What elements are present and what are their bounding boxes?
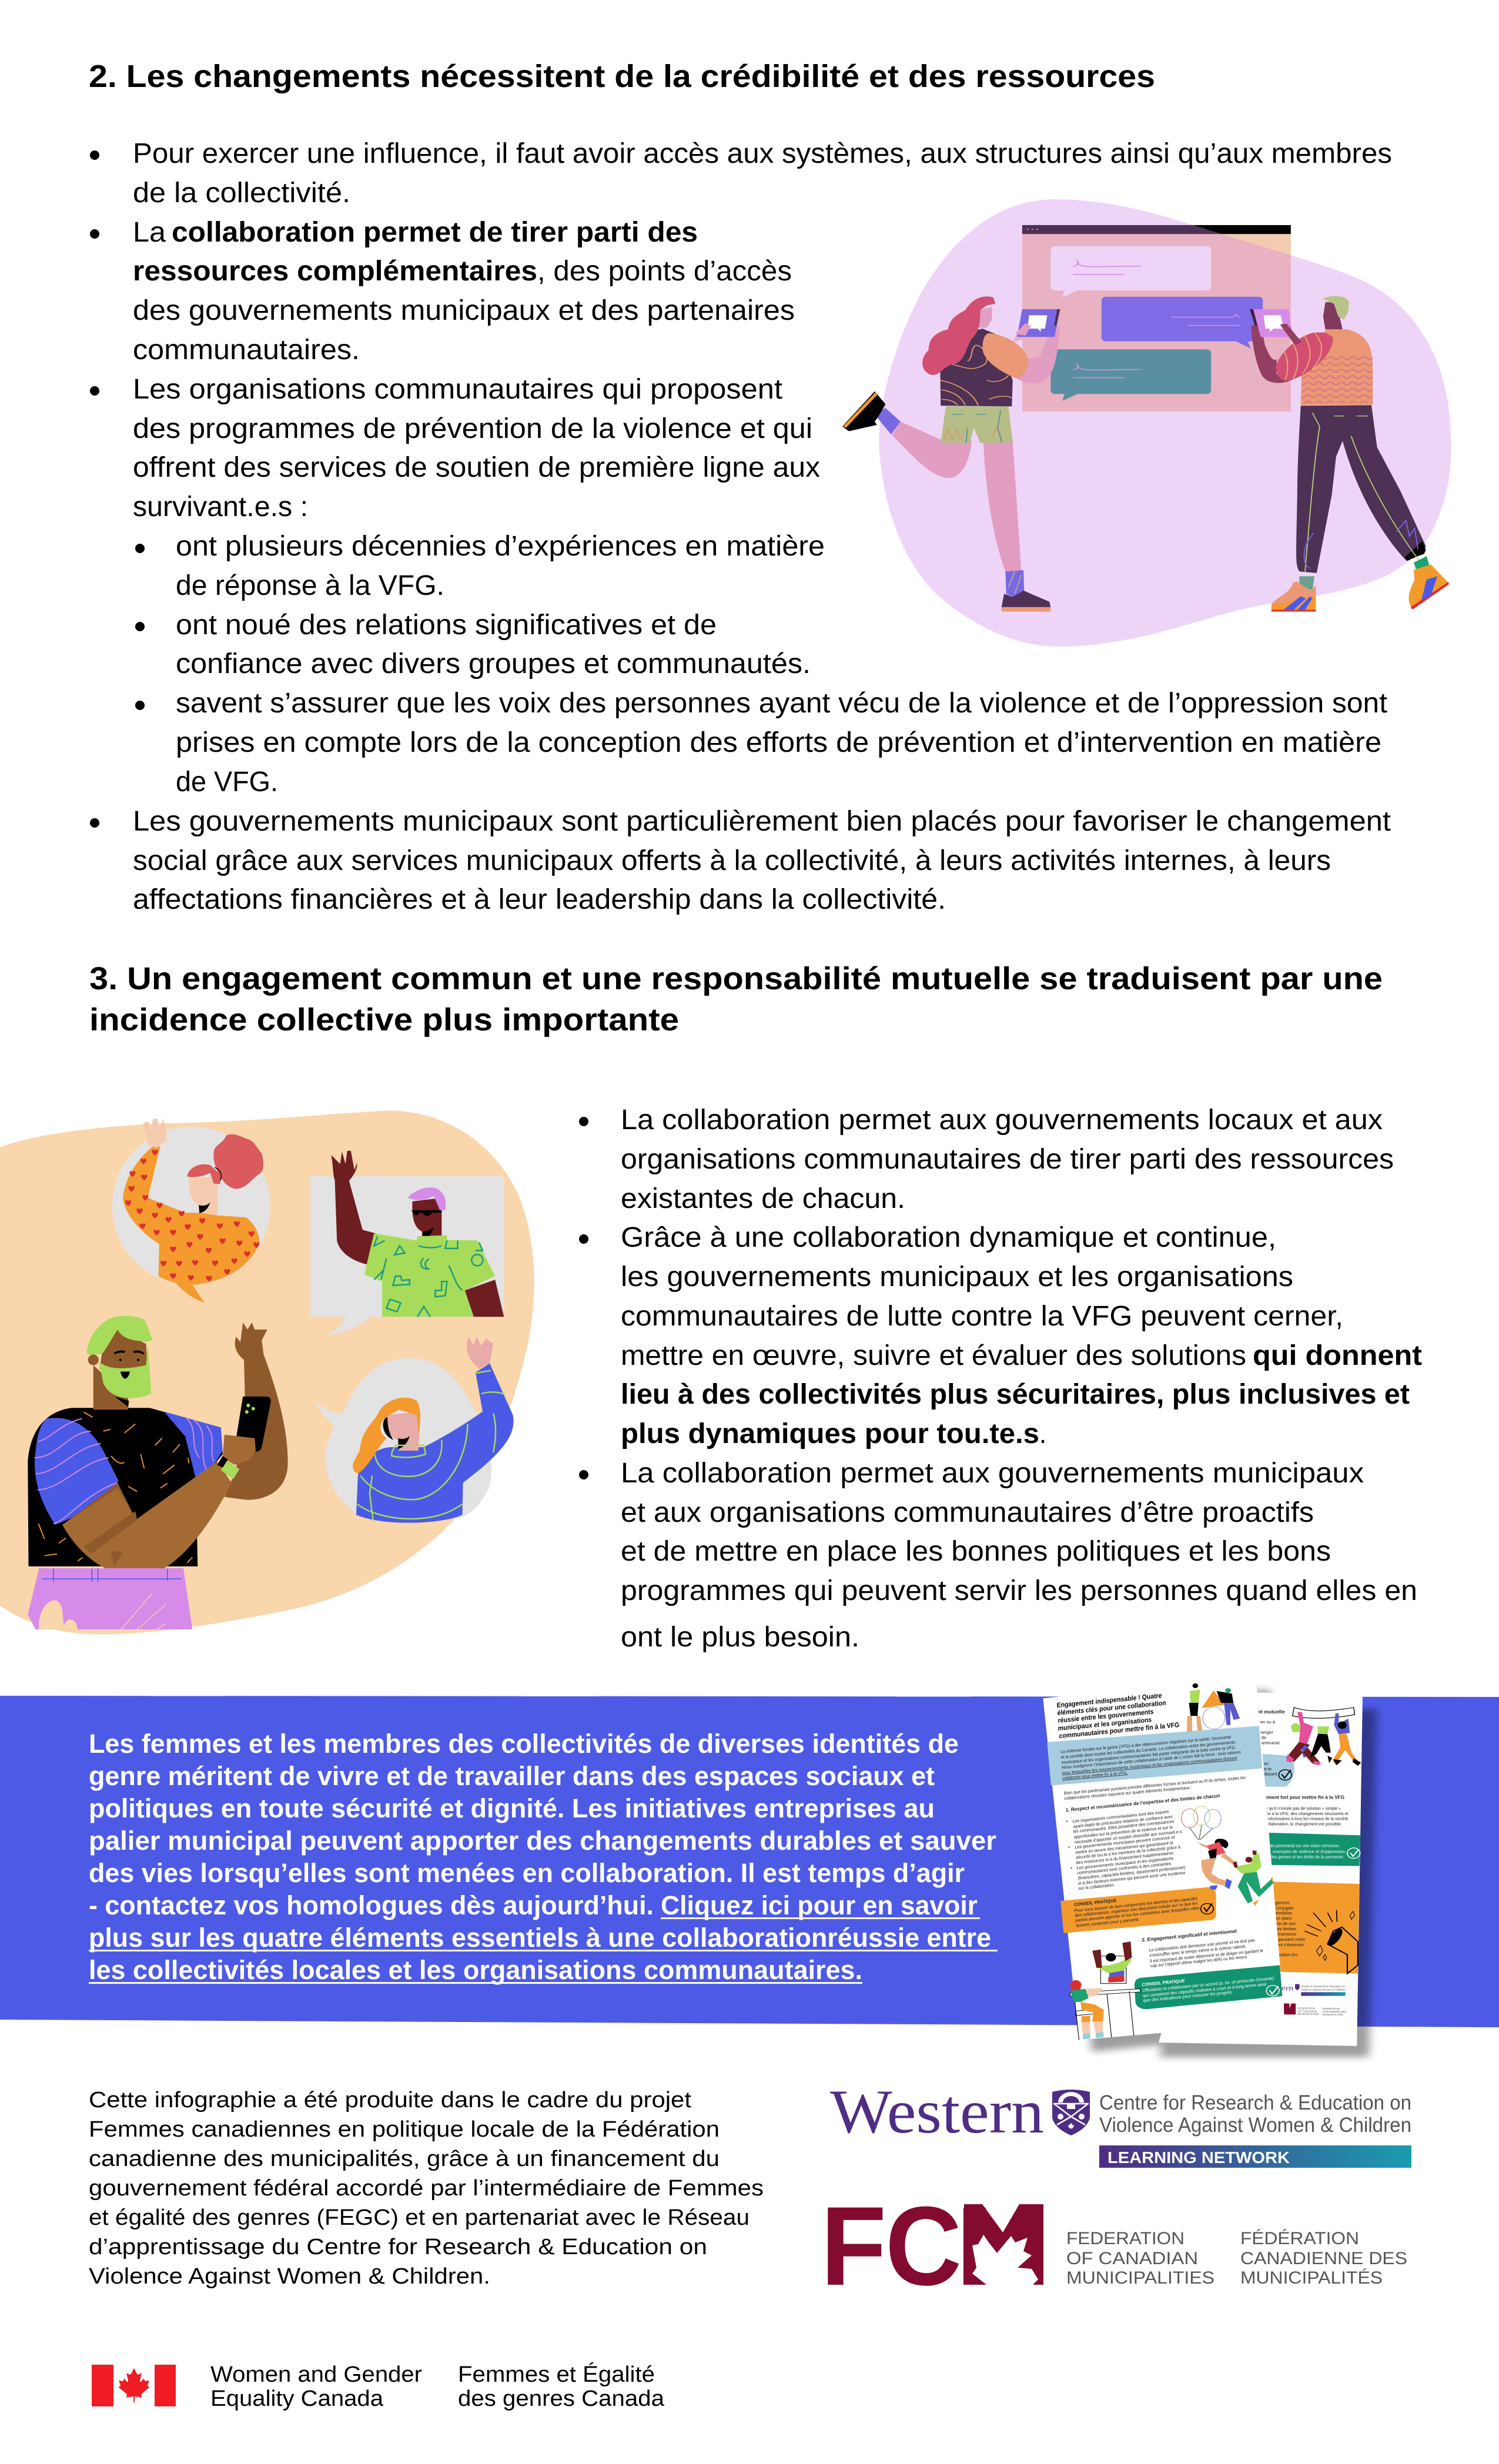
call to action text: Les femmes et les membres des collectivités de diverses identités de <box>89 1729 959 1759</box>
FCM name: MUNICIPALITIES <box>1066 2268 1214 2288</box>
back page logos: MUNICIPALITÉS <box>1323 2013 1343 2017</box>
back page: ollaboration, le changement est possible. <box>1266 1821 1342 1826</box>
FCM name: FÉDÉRATION <box>1240 2229 1359 2248</box>
back page: peuvent créer <box>1278 1937 1306 1942</box>
back page logos: OF CANADIAN <box>1297 2010 1317 2013</box>
bullet list: section 3 <box>579 1104 1422 1653</box>
front page text <box>1057 1691 1274 2003</box>
back page: ensibilise. <box>1275 1910 1293 1916</box>
back page: nécessaires à tous les niveaux de la société. <box>1268 1816 1349 1821</box>
credits text: canadienne des municipalités, grâce à un financement du <box>89 2147 720 2171</box>
logo: Western Centre for Research and Education <box>830 2077 1411 2168</box>
bullet list: section 2: prises en compte lors de la conception des efforts de prévention et d’intervention en matière <box>176 727 1381 758</box>
bullet list: section 3: programmes qui peuvent servir les personnes quand elles en <box>621 1575 1417 1606</box>
back page: conjugale <box>1276 1905 1294 1910</box>
front page text: réussie entre les gouvernements <box>1058 1708 1153 1725</box>
front page text: ayant établi de précieuses relations de confiance avec <box>1073 1814 1173 1829</box>
front page text: La violence fondée sur le genre (VFG) a des répercussions négatives sur la santé, l’économie <box>1060 1734 1231 1754</box>
front page text: que des indicateurs pour mesurer les progrès. <box>1143 1989 1233 2003</box>
bullet list: section 3: et de mettre en place les bonnes politiques et les bons <box>621 1536 1331 1567</box>
front page text: qui comprend des objectifs réalistes à court et à long terme ainsi <box>1143 1981 1266 1998</box>
person in square bubble <box>310 1151 504 1335</box>
bullet list: section 3: les gouvernements municipaux et les organisations <box>621 1261 1293 1293</box>
front page text: sur la collaboration. <box>1078 1882 1115 1891</box>
peach blob background <box>0 1110 534 1634</box>
bullet list: section 2: savent s’assurer que les voix des personnes ayant vécu de la violence et de l’oppression sont <box>176 688 1387 719</box>
back page: et <box>1264 1761 1269 1766</box>
logo: Federation of Canadian Municipalities <box>821 2184 1407 2309</box>
bullet list: section 2: ont noué des relations significatives et de <box>176 610 717 641</box>
front page text: doivent composer pour y parvenir. <box>1076 1916 1140 1928</box>
front page text: Engagement indispensable ! Quatre <box>1057 1691 1162 1709</box>
credits text: Violence Against Women & Children. <box>89 2264 490 2289</box>
bullet list: section 2: ont plusieurs décennies d’expériences en matière <box>176 531 825 562</box>
call to action text: palier municipal peuvent apporter des changements durables et sauver <box>89 1826 996 1856</box>
front page text: CONSEIL PRATIQUE <box>1074 1897 1117 1907</box>
front page text: pour lesquelles les gouvernements municipaux et les organisations communautaires doivent <box>1062 1755 1237 1776</box>
front page text: municipaux et les organisations <box>1058 1716 1152 1732</box>
back page: des genres et les droits de la personne. <box>1270 1854 1344 1859</box>
bullet list: section 2: affectations financières et à leur leadership dans la collectivité. <box>133 884 946 915</box>
front page text: éléments clés pour une collaboration <box>1058 1699 1166 1717</box>
icon: Canadian flag <box>92 2365 176 2406</box>
bullet list: section 3: lieu à des collectivités plus sécuritaires, plus inclusives et <box>621 1379 1410 1410</box>
icon: Western shield <box>1052 2090 1090 2135</box>
bullet list: section 2: ressources complémentaires <box>133 256 537 287</box>
back page: ein de son <box>1276 1921 1296 1926</box>
back page logos: Centre for Research & Education on <box>1301 1985 1346 1988</box>
front page icons and figures <box>1066 1683 1279 2040</box>
bullet list: section 3: qui donnent <box>1253 1340 1422 1371</box>
back page: ement fort pour mettre fin à la VFG <box>1265 1794 1344 1800</box>
front page text: Bien que les partenariats puissent prendre différentes formes et évoluent au fil du temps, toutes les <box>1064 1775 1246 1796</box>
credits text: Femmes canadiennes en politique locale de la Fédération <box>89 2117 720 2142</box>
back page <box>1159 1692 1363 2046</box>
front page text: les communautés. Elles possèdent des connaissances <box>1073 1819 1174 1834</box>
call to action text: politiques en toute sécurité et dignité. Les initiatives entreprises au <box>89 1793 935 1823</box>
FCM letters: M <box>956 2184 1051 2309</box>
flying woman <box>1214 1839 1224 1846</box>
bullet list: section 3: La collaboration permet aux gouvernements municipaux <box>621 1458 1364 1489</box>
back page: et de <box>1264 1766 1272 1772</box>
back page group photo <box>1286 1708 1361 1766</box>
front page text: Officialisez la collaboration par un accord (p. ex. un protocole d’entente) <box>1142 1976 1274 1993</box>
logo: Women and Gender Equality Canada: Equality Canada <box>210 2386 384 2411</box>
logo: Women and Gender Equality Canada: Women and Gender <box>210 2362 422 2387</box>
call to action text: des vies lorsqu’elles sont menées en collaboration. Il est temps d’agir <box>89 1858 965 1888</box>
front page text: collaborations réussies reposent sur quatre éléments fondamentaux : <box>1065 1785 1192 1801</box>
FCM letters: F <box>821 2184 886 2309</box>
bullet list: section 3: mettre en œuvre, suivre et évaluer des solutions <box>621 1340 1246 1371</box>
bullet list: section 2 <box>90 138 1392 915</box>
back page: ité mutuelle <box>1257 1709 1285 1715</box>
logo: Western Centre for Research and Education: Violence Against Women & Children <box>1099 2114 1411 2137</box>
front page text: Pour vous assurer de bien comprendre les attentes et les capacités <box>1075 1896 1197 1913</box>
desk scene <box>1100 1956 1126 1984</box>
back page logos: CANADIENNE DES <box>1323 2011 1347 2014</box>
link underlines <box>89 1917 998 1984</box>
front page text: collaborer pour mettre fin à la VFG. <box>1062 1770 1127 1781</box>
credits text: Cette infographie a été produite dans le cadre du projet <box>89 2088 691 2113</box>
logo: Women and Gender Equality Canada <box>92 2362 665 2411</box>
front page text: parties peuvent apporter et sur les contraintes avec lesquelles elles <box>1075 1905 1199 1923</box>
call to action text: - contactez vos homologues dès aujourd’hui. <box>89 1890 654 1920</box>
logo: Women and Gender Equality Canada: Femmes et Égalité <box>458 2362 655 2387</box>
back page: dépant <box>1263 1771 1277 1776</box>
credits text: gouvernement fédéral accordé par l’intermédiaire de Femmes <box>89 2176 764 2201</box>
bullet list: section 2: social grâce aux services municipaux offerts à la collectivité, à leurs activités internes, à leurs <box>133 845 1331 876</box>
bullet list: section 2: Pour exercer une influence, il faut avoir accès aux systèmes, aux structures ainsi qu’aux membres <box>133 138 1392 169</box>
call to action band <box>0 1696 1499 2027</box>
front page text: des ressources et à du financement supplémentaires. <box>1076 1850 1175 1865</box>
bullet list: section 3: existantes de chacun. <box>621 1183 905 1214</box>
front page text: communautaires sont confrontés à des contraintes <box>1077 1861 1171 1876</box>
page shadows <box>1057 1690 1377 2057</box>
front page <box>1043 1677 1285 2040</box>
bullet list: section 3: organisations communautaires de tirer parti des ressources <box>621 1144 1394 1175</box>
bullet list: section 2: Les organisations communautaires qui proposent <box>133 374 782 405</box>
call to action text: genre méritent de vivre et de travailler dans des espaces sociaux et <box>89 1761 935 1791</box>
bullet list: section 2: collaboration permet de tirer parti des <box>172 217 698 248</box>
leaflet preview: two tilted pages <box>1043 1677 1377 2057</box>
bullet list: section 3: . <box>1039 1418 1046 1449</box>
front page text: approfondies sur la prévention de la violence et sur la <box>1074 1824 1173 1840</box>
woman figure <box>842 296 1060 612</box>
learning network bar: LEARNING NETWORK <box>1107 2148 1290 2167</box>
credits text <box>89 2088 764 2289</box>
bullet list: section 2: de la collectivité. <box>133 178 350 209</box>
chat window <box>1022 225 1291 411</box>
bullet list: section 2: confiance avec divers groupes et communautés. <box>176 648 811 679</box>
heading: section 3: incidence collective plus importante <box>89 1002 679 1037</box>
bullets <box>90 150 145 828</box>
bullet list: section 2: survivant.e.s : <box>133 491 308 523</box>
front page text: Les organisations communautaires sont des experts <box>1073 1809 1169 1824</box>
pink blob background <box>879 199 1451 647</box>
back page: hanger <box>1259 1729 1273 1735</box>
front page text: communautaires pour mettre fin à la VFG <box>1059 1720 1179 1740</box>
FCM name: MUNICIPALITÉS <box>1240 2268 1383 2288</box>
front page text: La collaboration doit demeurer une priorité et ne doit pas <box>1149 1937 1255 1953</box>
front page text: 2. Engagement significatif et intentionnel <box>1142 1929 1237 1943</box>
bullet list: section 2: des programmes de prévention de la violence et qui <box>133 413 812 444</box>
heading: section 3: 3. Un engagement commun et une responsabilité mutuelle se traduisent par une <box>89 961 1383 996</box>
bullet list: section 3: communautaires de lutte contre la VFG peuvent cerner, <box>621 1301 1343 1332</box>
front page text: Les gouvernements municipaux et les organisations <box>1077 1856 1173 1870</box>
back page logos: ern <box>1281 1984 1294 1991</box>
logo: Women and Gender Equality Canada: des genres Canada <box>458 2386 665 2411</box>
front page text: 1. Respect et reconnaissance de l’expertise et des limites de chacun <box>1066 1793 1220 1813</box>
man with phone <box>28 1316 288 1629</box>
front page text: sécurité de tou.te.s les membres de la collectivité grâce à <box>1076 1844 1180 1860</box>
man figure <box>1250 296 1449 612</box>
front page text: Nous soulignons l’importance de cette collaboration à l’aide de L’union fait la force : trois raisons <box>1062 1749 1241 1770</box>
front page text: (financières, capacités limitées, épuisement professionnel) <box>1078 1864 1185 1881</box>
bullet list: section 3: ont le plus besoin. <box>621 1622 859 1653</box>
front page text: et à des facteurs externes qui peuvent avoir une incidence <box>1078 1870 1186 1886</box>
FCM name <box>1066 2229 1407 2288</box>
bullet list: section 3: Grâce à une collaboration dynamique et continue, <box>621 1222 1276 1253</box>
back page: exemptes de violence et d’oppression, <box>1273 1849 1346 1854</box>
logo: Western Centre for Research and Education: Western <box>830 2077 1044 2146</box>
illustration: two people with chat window <box>842 199 1451 647</box>
back page logos: FEDERATION <box>1297 2007 1315 2010</box>
FCM letters: C <box>885 2184 962 2309</box>
back page: en place <box>1276 1916 1292 1921</box>
back page: ner ou à <box>1259 1719 1275 1725</box>
bullet list: section 2: de réponse à la VFG. <box>176 570 444 601</box>
back page: gement <box>1275 1900 1290 1905</box>
back page: partenariat. <box>1259 1740 1281 1745</box>
FCM letters <box>821 2184 1051 2309</box>
bullet list: section 3: et aux organisations communautaires d’être proactifs <box>621 1497 1314 1528</box>
green man <box>1234 1852 1262 1873</box>
call to action text: Cliquez ici pour en savoir <box>661 1890 978 1920</box>
back page: e qu’il n’existe pas de solution « simple » <box>1266 1806 1341 1811</box>
credits text: d’apprentissage du Centre for Research & Education on <box>89 2235 707 2259</box>
back page logos: FÉDÉRATION <box>1323 2007 1340 2011</box>
FCM name: FEDERATION <box>1066 2229 1185 2248</box>
front page text: s’essouffler avec le temps même si le rythme ralentit. <box>1149 1943 1246 1958</box>
front page text: CONSEIL PRATIQUE <box>1142 1978 1185 1987</box>
bullet list: section 2: La <box>133 217 166 248</box>
person in circle bubble <box>112 1119 270 1303</box>
back page logos: MUNICIPALITIES <box>1297 2013 1319 2016</box>
bullet list: section 2: Les gouvernements municipaux sont particulièrement bien placés pour favoriser le changement <box>133 806 1391 837</box>
call to action text: plus sur les quatre éléments essentiels à une collaborationréussie entre <box>89 1923 991 1953</box>
window behind blob <box>1022 225 1291 411</box>
front page text: des collaborateurs, organisez une discussion initiale sur ce que les <box>1075 1900 1197 1918</box>
bullet list: section 2: de VFG. <box>176 766 278 798</box>
front page text: municipaux et les organisations communautaires fait partie intégrante de la lutte contre la VFG. <box>1062 1745 1236 1765</box>
back page: du partenariat sur une vision commune : <box>1270 1843 1341 1848</box>
figures with triangle <box>1202 1690 1225 1708</box>
call to action text <box>89 1729 996 1985</box>
front page text: cap sur l’objectif ultime malgré les défis ou les revers. <box>1150 1954 1248 1968</box>
bullet list: section 2: , des points d’accès <box>537 256 792 287</box>
back page logos: Violence Against Women & Children <box>1301 1988 1346 1991</box>
back page: out s’épanouir. <box>1277 1942 1304 1947</box>
back page: ernements <box>1276 1931 1296 1937</box>
back page: fin à la VFG; des changements structurels et <box>1266 1811 1349 1816</box>
balloons <box>1182 1806 1221 1840</box>
bullet list: section 2: offrent des services de soutien de première ligne aux <box>133 452 820 483</box>
bullet list: section 3: plus dynamiques pour tou.te.s <box>621 1418 1039 1449</box>
call to action text: les collectivités locales et les organisations communautaires. <box>89 1955 862 1985</box>
credits text: et égalité des genres (FEGC) et en partenariat avec le Réseau <box>89 2205 750 2230</box>
FCM name: OF CANADIAN <box>1066 2249 1198 2268</box>
front page text: Les gouvernements municipaux peuvent concevoir et <box>1075 1834 1175 1850</box>
illustration: people waving in speech bubbles <box>0 1110 534 1634</box>
front page text: et la société dans toutes les collectivités du Canada. La collaboration entre les gouvernements <box>1061 1739 1235 1760</box>
bullets <box>579 1117 588 1479</box>
learning network bar <box>1099 2145 1411 2168</box>
person in round bubble <box>315 1337 514 1523</box>
back page logos <box>1281 1984 1347 2017</box>
FCM name: CANADIENNE DES <box>1240 2249 1407 2268</box>
front page text: nécessité d’apporter un soutien diversifié aux survivant.e.s. <box>1075 1829 1183 1844</box>
back page: de <box>1262 1735 1267 1740</box>
bullet list: section 3: La collaboration permet aux gouvernements locaux et aux <box>621 1104 1383 1136</box>
bullet list: section 2: communautaires. <box>133 334 360 366</box>
heading: section 3 <box>89 961 1383 1037</box>
front page text: mettre en œuvre des mécanismes qui garantissent la <box>1076 1840 1173 1855</box>
bullet list: section 2: des gouvernements municipaux et des partenaires <box>133 295 795 326</box>
heading: section 2: 2. Les changements nécessitent de la crédibilité et des ressources <box>89 59 1155 94</box>
logo: Western Centre for Research and Education: Centre for Research & Education on <box>1099 2091 1411 2114</box>
back page: cation (en <box>1279 1952 1298 1957</box>
back page: les limites <box>1276 1926 1296 1931</box>
front page text: Il est important de rester déterminé et de diriger en gardant le <box>1150 1948 1263 1964</box>
